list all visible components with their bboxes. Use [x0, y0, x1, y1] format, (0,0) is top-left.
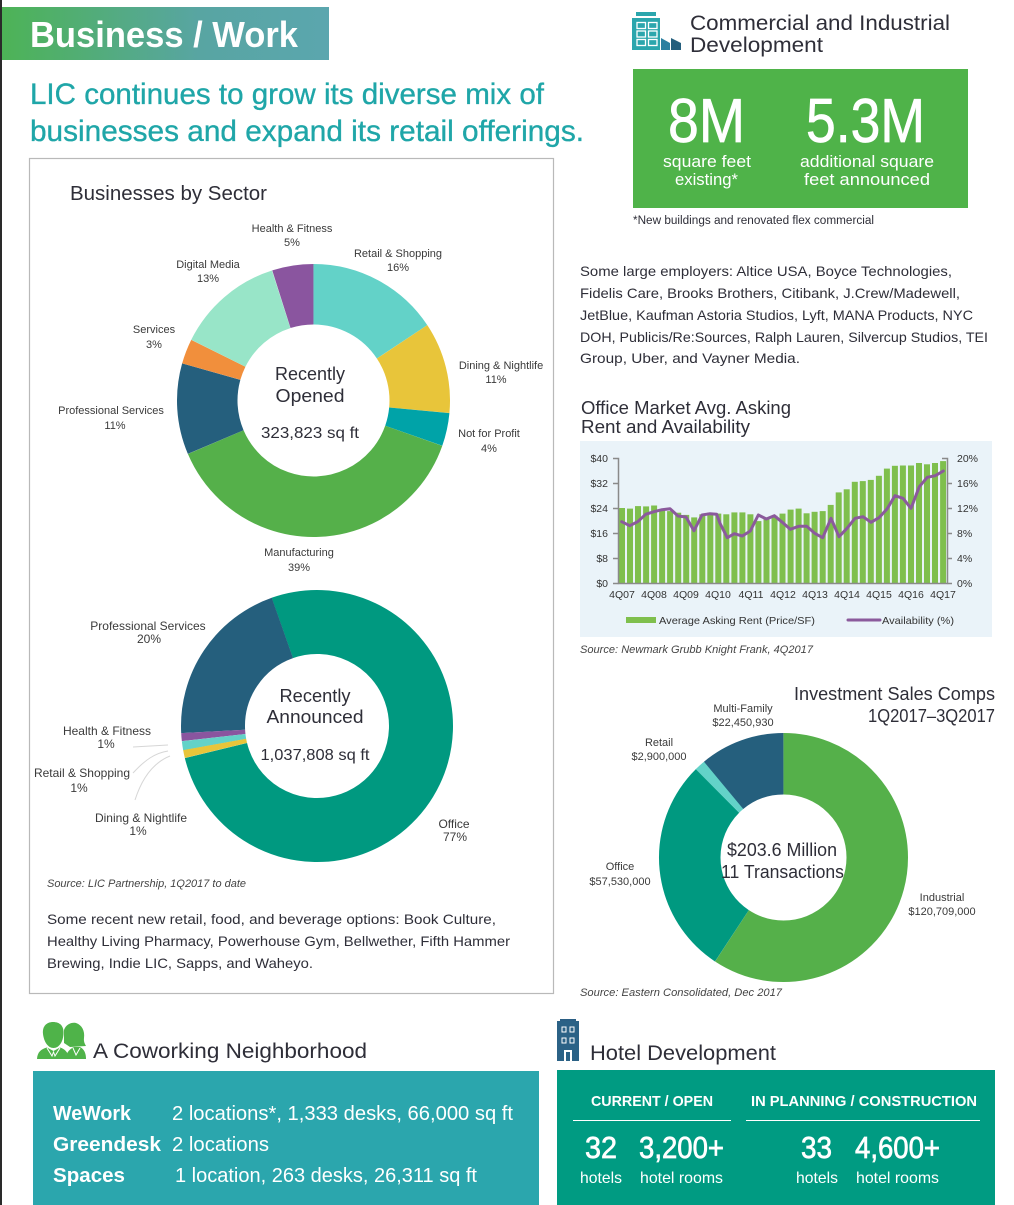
- footnote: *New buildings and renovated flex commercial: [633, 215, 874, 227]
- text block: large employers: Fidelis Care, Brooks Brothers, Citibank, J.Crew/Madewell,: [580, 285, 960, 301]
- heading: commercial and industrial development: [690, 12, 950, 57]
- text block: large employers: Some large employers: Altice USA, Boyce Technologies,: [580, 263, 952, 279]
- text block: retail options: Brewing, Indie LIC, Sapps, and Waheyo.: [47, 955, 313, 971]
- donut chart: investment sales: [651, 725, 916, 990]
- icon: coworking people: [37, 1022, 86, 1059]
- legend: Availability (%): [882, 615, 954, 627]
- x axis labels: 4Q09: [673, 589, 699, 601]
- right axis labels: 4%: [957, 553, 972, 565]
- heading: commercial and industrial development: Development: [690, 34, 823, 57]
- sector labels: recently opened: 16%: [387, 262, 409, 274]
- panel: coworking: 2 locations: [172, 1134, 269, 1156]
- text block: large employers: DOH, Publicis/Re:Sources, Ralph Lauren, Silvercup Studios, TEI: [580, 329, 988, 345]
- investment labels: $2,900,000: [631, 751, 687, 763]
- heading: commercial and industrial development: Commercial and Industrial: [690, 12, 950, 35]
- sector labels: recently announced: Health & Fitness: [63, 724, 151, 738]
- panel: hotel development: 33: [801, 1130, 832, 1165]
- sector labels: recently announced: 1%: [97, 737, 115, 751]
- donut center label: recently opened: [261, 364, 360, 442]
- donut chart: recently opened: [166, 253, 461, 548]
- subtitle heading: businesses and expand its retail offerings.: [30, 115, 584, 148]
- panel: hotel development: hotel rooms: [856, 1170, 939, 1187]
- x axis labels: 4Q14: [834, 589, 860, 601]
- investment labels: Retail: [645, 737, 673, 749]
- donut center label: recently opened: Recently: [275, 364, 345, 384]
- investment labels: Multi-Family: [713, 703, 773, 715]
- investment labels: Office: [606, 861, 634, 873]
- sector labels: recently announced: 1%: [129, 824, 147, 838]
- sector labels: recently announced: Professional Services: [90, 619, 206, 633]
- x axis labels: 4Q11: [739, 589, 764, 601]
- investment labels: [589, 703, 976, 918]
- legend: Average Asking Rent (Price/SF): [659, 615, 815, 627]
- x axis labels: 4Q17: [930, 589, 956, 601]
- panel: square feet stats: [633, 69, 968, 208]
- panel: hotel development: 4,600+: [855, 1130, 940, 1165]
- sector labels: recently announced: 1%: [70, 781, 88, 795]
- axes: [613, 458, 952, 584]
- panel: coworking: 1 location, 263 desks, 26,311 sq ft: [175, 1165, 477, 1187]
- text block: retail options: Some recent new retail, food, and beverage options: Book Culture,: [47, 911, 496, 927]
- investment labels: $22,450,930: [712, 717, 774, 729]
- panel: hotel development: [557, 1070, 995, 1205]
- sector labels: recently opened: 11%: [485, 374, 507, 386]
- investment labels: $120,709,000: [908, 906, 976, 918]
- investment labels: Industrial: [920, 892, 964, 904]
- left axis labels: $24: [590, 503, 608, 515]
- sector labels: recently announced: Dining & Nightlife: [95, 811, 187, 825]
- chart: office rent and availability: [580, 441, 992, 637]
- panel: square feet stats: additional square: [800, 152, 934, 171]
- panel: square feet stats: square feet: [663, 152, 751, 171]
- sector labels: recently opened: [58, 223, 543, 574]
- panel: square feet stats: 8M: [668, 87, 745, 156]
- panel: businesses by sector: [30, 158, 554, 994]
- panel: hotel development: hotels: [796, 1170, 838, 1187]
- legend: [626, 615, 954, 627]
- right axis labels: [957, 453, 978, 590]
- source note: Eastern Consolidated: Source: Eastern Consolidated, Dec 2017: [580, 987, 783, 999]
- heading: hotel development: Hotel Development: [590, 1042, 776, 1065]
- panel: hotel development: 32: [585, 1130, 617, 1165]
- heading: businesses by sector: Businesses by Sector: [70, 183, 267, 205]
- right axis labels: 20%: [957, 453, 978, 465]
- x axis labels: 4Q10: [705, 589, 731, 601]
- sector labels: recently announced: Retail & Shopping: [34, 766, 130, 780]
- sector labels: recently opened: 11%: [104, 420, 126, 432]
- panel: square feet stats: 5.3M: [806, 87, 925, 156]
- sector labels: recently announced: Office: [438, 817, 470, 831]
- panel: square feet stats: feet announced: [804, 170, 930, 189]
- panel: coworking: Greendesk: [53, 1134, 162, 1156]
- sector labels: recently announced: 77%: [443, 830, 467, 844]
- bars: average asking rent: [619, 461, 946, 583]
- sector labels: recently opened: Digital Media: [176, 259, 241, 271]
- panel: coworking: [33, 1071, 539, 1205]
- left axis labels: [590, 453, 608, 590]
- investment labels: $57,530,000: [589, 876, 651, 888]
- sector labels: recently opened: 4%: [481, 443, 497, 455]
- left axis labels: $32: [590, 478, 608, 490]
- right axis labels: 16%: [957, 478, 978, 490]
- sector labels: recently opened: 13%: [197, 273, 219, 285]
- sector labels: recently opened: 3%: [146, 339, 162, 351]
- donut center label: recently announced: [260, 686, 370, 764]
- donut center label: recently announced: Recently: [280, 686, 350, 706]
- heading: office market: Office Market Avg. Asking: [581, 398, 791, 418]
- panel: hotel development: CURRENT / OPEN: [591, 1093, 713, 1110]
- panel: coworking: Spaces: [53, 1165, 125, 1187]
- panel: coworking: 2 locations*, 1,333 desks, 66,000 sq ft: [172, 1103, 513, 1125]
- panel: hotel development: hotel rooms: [640, 1170, 723, 1187]
- donut center label: recently announced: 1,037,808 sq ft: [260, 747, 370, 764]
- text block: large employers: Group, Uber, and Vayner Media.: [580, 350, 800, 366]
- donut center label: recently opened: Opened: [276, 386, 344, 406]
- text block: large employers: JetBlue, Kaufman Astoria Studios, Lyft, MANA Products, NYC: [580, 307, 973, 323]
- right axis labels: 8%: [957, 528, 972, 540]
- sector labels: recently opened: Retail & Shopping: [354, 248, 442, 260]
- x axis labels: [609, 589, 956, 601]
- heading: coworking: A Coworking Neighborhood: [93, 1040, 367, 1063]
- sector labels: recently announced: [34, 619, 470, 844]
- panel: square feet stats: existing*: [675, 170, 738, 189]
- donut center label: recently announced: Announced: [266, 707, 364, 727]
- title banner: [2, 7, 329, 60]
- subtitle heading: [30, 78, 584, 148]
- donut center label: investment total: 11 Transactions: [721, 862, 844, 882]
- heading: office market: [581, 398, 791, 437]
- leader lines: [133, 745, 170, 800]
- panel: hotel development: IN PLANNING / CONSTRUCTION: [751, 1093, 977, 1110]
- heading: office market: Rent and Availability: [581, 417, 750, 437]
- subtitle heading: LIC continues to grow its diverse mix of: [30, 78, 545, 111]
- x axis labels: 4Q13: [802, 589, 828, 601]
- icon: hotel building: [557, 1019, 579, 1061]
- panel: hotel development: hotels: [580, 1170, 622, 1187]
- text block: retail options: Healthy Living Pharmacy, Powerhouse Gym, Bellwether, Fifth Hammer: [47, 933, 510, 949]
- x axis labels: 4Q12: [770, 589, 796, 601]
- donut center label: investment total: $203.6 Million: [727, 840, 837, 860]
- sector labels: recently opened: Dining & Nightlife: [459, 360, 543, 372]
- sector labels: recently opened: 5%: [284, 237, 300, 249]
- left axis labels: $40: [590, 453, 608, 465]
- heading: investment sales comps: 1Q2017–3Q2017: [868, 706, 995, 726]
- sector labels: recently announced: 20%: [137, 632, 161, 646]
- donut chart: recently announced: [184, 593, 450, 859]
- left axis labels: $16: [590, 528, 608, 540]
- donut center label: recently opened: 323,823 sq ft: [261, 425, 360, 442]
- panel: coworking: WeWork: [53, 1103, 132, 1125]
- panel: hotel development: 3,200+: [639, 1130, 724, 1165]
- x axis labels: 4Q15: [866, 589, 892, 601]
- icon: commercial building: [632, 12, 681, 50]
- x axis labels: 4Q08: [641, 589, 667, 601]
- left axis labels: $0: [596, 578, 608, 590]
- sector labels: recently opened: Manufacturing: [264, 547, 334, 559]
- x axis labels: 4Q07: [609, 589, 635, 601]
- sector labels: recently opened: Not for Profit: [458, 428, 520, 440]
- heading: investment sales comps: [794, 684, 995, 726]
- sector labels: recently opened: Professional Services: [58, 405, 164, 417]
- right axis labels: 12%: [957, 503, 978, 515]
- sector labels: recently opened: 39%: [288, 562, 310, 574]
- left axis labels: $8: [596, 553, 608, 565]
- title banner: Business / Work: [30, 14, 299, 55]
- text block: retail options: [47, 911, 510, 971]
- line: availability: [622, 471, 943, 538]
- right axis labels: 0%: [957, 578, 972, 590]
- sector labels: recently opened: Health & Fitness: [252, 223, 333, 235]
- sector labels: recently opened: Services: [133, 324, 176, 336]
- donut center label: investment total: [721, 840, 844, 882]
- text block: large employers: [580, 263, 988, 366]
- heading: investment sales comps: Investment Sales Comps: [794, 684, 995, 704]
- source note: LIC Partnership: Source: LIC Partnership, 1Q2017 to date: [47, 878, 246, 890]
- source note: Newmark: Source: Newmark Grubb Knight Frank, 4Q2017: [580, 644, 814, 656]
- x axis labels: 4Q16: [898, 589, 924, 601]
